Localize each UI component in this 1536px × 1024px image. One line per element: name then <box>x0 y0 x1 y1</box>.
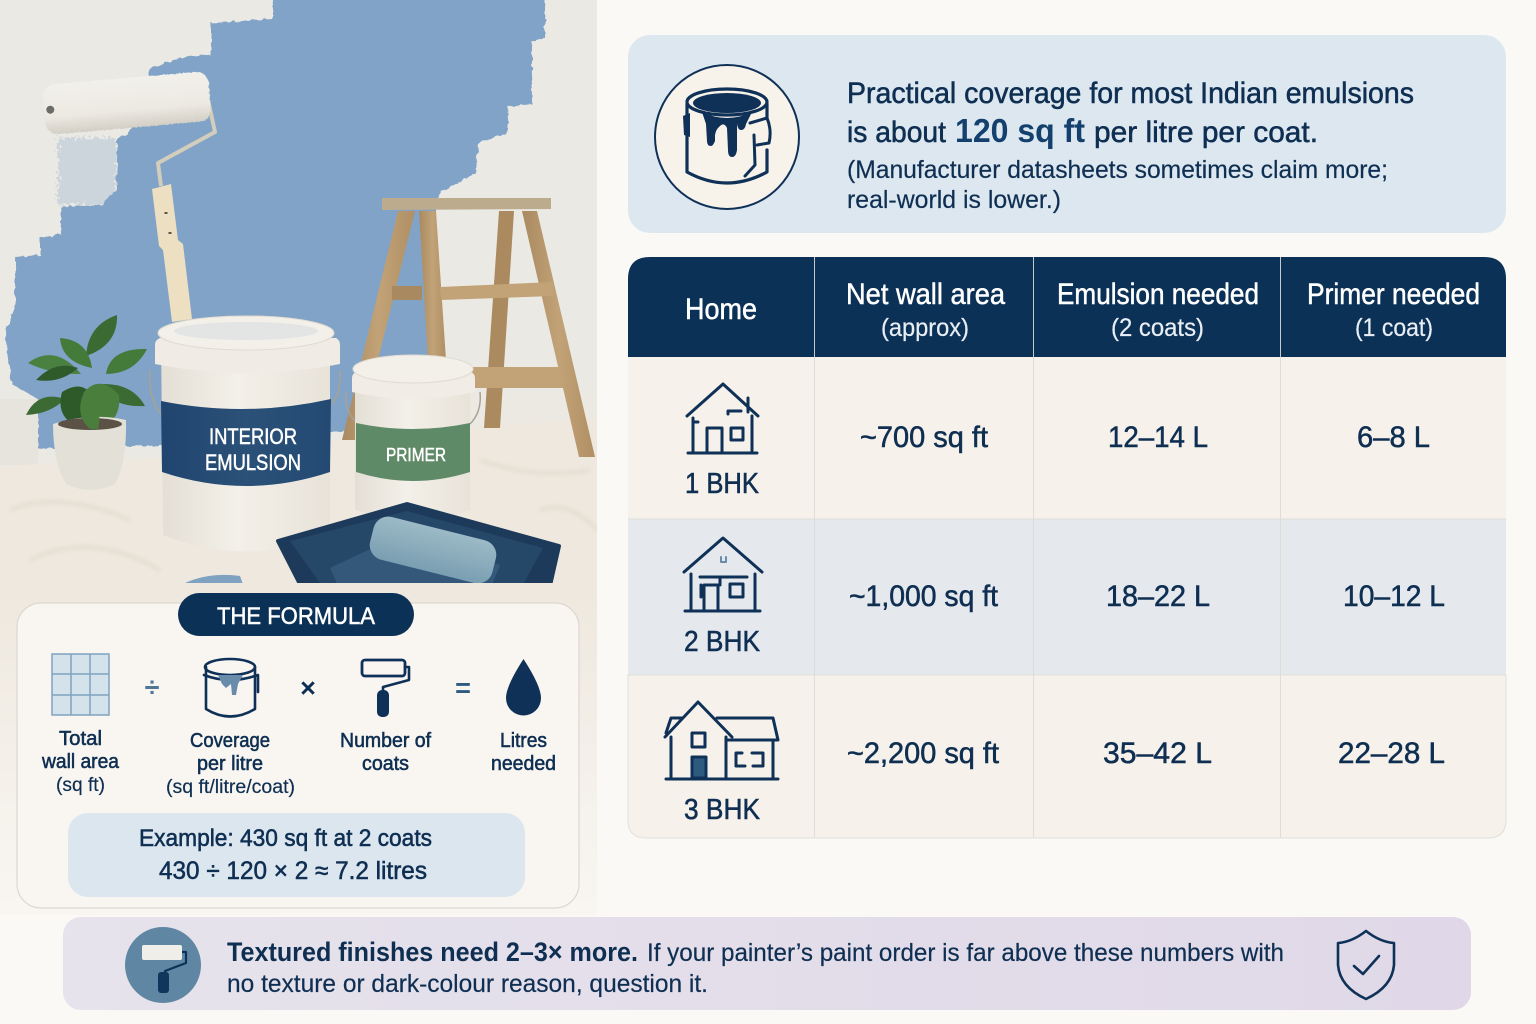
row: 3 BHK <box>665 702 1445 826</box>
primer body <box>355 392 470 512</box>
skirting board right <box>470 392 597 427</box>
worked example: 430 ÷ 120 × 2 ≈ 7.2 litres <box>159 857 427 885</box>
banner text: If your painter’s paint order is far above these numbers with <box>647 939 1284 967</box>
bucket rim inner <box>174 322 318 340</box>
primer lid ring <box>352 372 475 396</box>
icon: large house <box>665 702 778 779</box>
bucket lid ring <box>155 338 340 373</box>
bucket wire handle <box>150 370 340 415</box>
table row 1 background <box>628 357 1506 519</box>
header: home: Home <box>685 293 757 326</box>
stool right leg <box>522 211 595 457</box>
pot <box>53 417 126 490</box>
primer 1 BHK: 6–8 L <box>1357 421 1430 454</box>
header: primer needed: Primer needed <box>1307 278 1480 311</box>
header: net wall area: (approx) <box>881 314 969 342</box>
icon: shield with check <box>1338 931 1394 999</box>
formula heading pill <box>178 593 414 636</box>
worked example: Example: 430 sq ft at 2 coats <box>139 825 432 852</box>
callout text: (Manufacturer datasheets sometimes claim more; <box>847 156 1388 184</box>
banner background <box>63 917 1471 1010</box>
bucket rim <box>158 316 334 350</box>
table row 3 background <box>628 675 1506 838</box>
table row 2 background <box>628 519 1506 675</box>
callout text: Practical coverage for most Indian emulsions <box>847 77 1414 110</box>
fade beneath photo <box>0 583 597 915</box>
label: litres needed <box>491 730 556 775</box>
icon: wall grid <box>52 654 109 715</box>
label: total wall area <box>41 728 120 796</box>
divide sign: ÷ <box>145 672 160 702</box>
net area 3 BHK: ~2,200 sq ft <box>847 737 1000 770</box>
primer label band <box>356 423 470 481</box>
paint tray with roller <box>278 504 559 590</box>
stool upper rung <box>440 282 553 300</box>
icon: small house <box>687 384 758 453</box>
row: 1 BHK <box>685 384 1430 500</box>
banner text: no texture or dark-colour reason, question it. <box>227 970 708 998</box>
tray outer <box>278 504 559 590</box>
label: coverage per litre <box>166 730 295 798</box>
tray inner <box>290 511 543 590</box>
primer rim <box>353 355 473 383</box>
roller sleeve <box>42 71 212 135</box>
skirting board left <box>37 414 38 442</box>
photo: painting supplies against a part-painted wall <box>0 0 597 915</box>
banner: textured finishes warning <box>63 917 1471 1010</box>
icon: paint drop <box>506 659 541 716</box>
icon: paint roller <box>362 660 409 717</box>
label: number of coats <box>340 730 431 775</box>
header: emulsion needed: (2 coats) <box>1111 314 1204 342</box>
label: coverage per litre: Coverage <box>190 730 270 752</box>
net area 2 BHK: ~1,000 sq ft <box>849 580 999 613</box>
label: 3 BHK: 3 BHK <box>684 794 761 826</box>
callout text: real-world is lower.) <box>847 186 1061 214</box>
callout text <box>847 77 1414 214</box>
label: litres needed: Litres <box>500 730 547 752</box>
primer 2 BHK: 10–12 L <box>1343 580 1445 613</box>
roller frame <box>158 100 215 186</box>
stool left leg <box>342 211 415 440</box>
leaves <box>26 315 147 430</box>
label: litres needed: needed <box>491 753 556 775</box>
potted plant <box>26 315 147 490</box>
primer wire handle <box>346 392 480 424</box>
panel: coverage callout <box>628 35 1506 233</box>
header: emulsion needed: Emulsion needed <box>1057 278 1259 311</box>
row: 2 BHK <box>684 538 1445 658</box>
wall <box>0 0 597 470</box>
emulsion label text: INTERIOR <box>209 424 297 449</box>
stool rear rung <box>472 367 563 388</box>
label: total wall area: wall area <box>41 751 120 773</box>
pot soil <box>58 418 122 430</box>
dry-roller streaks <box>58 138 117 205</box>
emulsion label text <box>206 428 300 470</box>
icon: medium house <box>684 538 762 611</box>
table: paint needed by home size <box>628 257 1506 838</box>
banner text: Textured finishes need 2–3× more. <box>227 937 638 967</box>
roller handle <box>152 184 192 322</box>
panel: the formula <box>17 593 579 908</box>
emulsion 3 BHK: 35–42 L <box>1103 737 1212 770</box>
callout background <box>628 35 1506 233</box>
label: 1 BHK: 1 BHK <box>685 468 760 500</box>
callout text: is about <box>847 116 947 149</box>
wooden step stool <box>342 198 595 457</box>
label: coverage per litre: (sq ft/litre/coat) <box>166 777 295 798</box>
small bucket: primer <box>346 355 480 519</box>
header: primer needed <box>1307 278 1480 342</box>
net area 1 BHK: ~700 sq ft <box>860 421 989 454</box>
roller handle holes <box>166 212 170 234</box>
formula card <box>17 603 579 908</box>
emulsion label text: EMULSION <box>205 450 301 475</box>
table header background <box>628 257 1506 357</box>
callout text: per litre per coat. <box>1094 116 1318 149</box>
header: net wall area <box>846 278 1005 342</box>
large bucket: interior emulsion <box>150 316 340 552</box>
emulsion 1 BHK: 12–14 L <box>1108 421 1208 454</box>
stool top <box>382 198 551 210</box>
stool rear legs <box>484 211 514 428</box>
tray roller <box>367 513 499 587</box>
primer 3 BHK: 22–28 L <box>1338 737 1445 770</box>
icon: paint can <box>204 659 258 716</box>
callout text: 120 sq ft <box>955 112 1085 149</box>
primer label text: PRIMER <box>386 444 446 465</box>
floor drop cloth <box>0 470 597 583</box>
spilled paint mark <box>185 575 245 590</box>
label: total wall area: (sq ft) <box>56 775 105 796</box>
emulsion label band <box>161 399 331 486</box>
header: emulsion needed <box>1057 278 1259 342</box>
wall roller <box>42 71 215 322</box>
label: number of coats: coats <box>362 753 409 775</box>
banner text <box>227 937 1284 998</box>
label: 2 BHK: 2 BHK <box>684 626 761 658</box>
pot front leaf <box>80 392 99 429</box>
worked example <box>68 813 525 897</box>
emulsion 2 BHK: 18–22 L <box>1106 580 1210 613</box>
bucket body <box>161 365 330 552</box>
cloth folds <box>10 460 597 570</box>
header: net wall area: Net wall area <box>846 278 1005 311</box>
tray well <box>330 535 500 590</box>
header: primer needed: (1 coat) <box>1355 314 1433 342</box>
formula heading pill: THE FORMULA <box>217 603 375 630</box>
icon: textured roller <box>125 927 201 1003</box>
label: coverage per litre: per litre <box>197 753 263 775</box>
stool centre leg <box>419 211 446 360</box>
label: total wall area: Total <box>59 728 102 750</box>
equals sign: = <box>455 673 471 703</box>
label: number of coats: Number of <box>340 730 431 752</box>
icon: dripping paint can <box>655 65 799 209</box>
blue painted patch <box>5 0 545 449</box>
multiply sign: × <box>300 673 316 703</box>
stool short rung <box>392 286 422 300</box>
